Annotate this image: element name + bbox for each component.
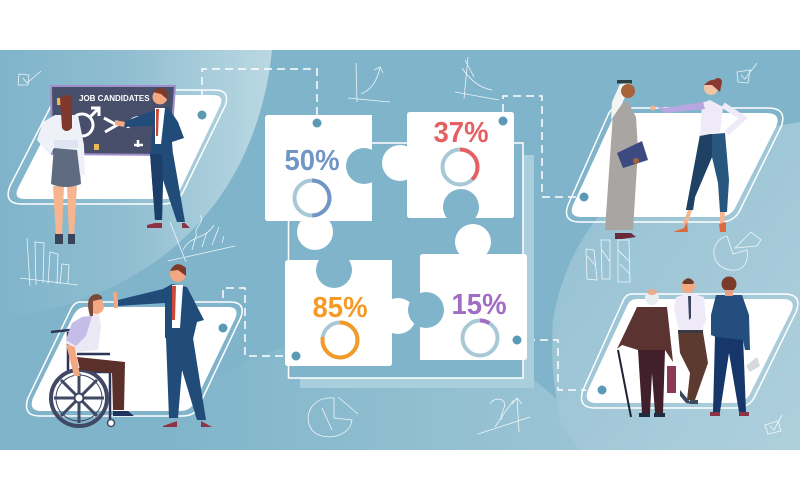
puzzle piece: 50% <box>265 115 382 250</box>
person: elderly man with cane <box>617 289 676 417</box>
person: woman from behind <box>37 95 85 244</box>
puzzle piece: 15% <box>408 224 527 360</box>
person: thinking man <box>674 278 708 404</box>
person: man pointing at board <box>115 88 190 228</box>
person: man in robe with folder <box>605 80 648 239</box>
label: 15%: 15% <box>452 289 507 321</box>
chalkboard: job candidates <box>51 86 175 155</box>
wheelchair <box>51 330 114 426</box>
ring: 85% <box>322 322 358 358</box>
briefcase <box>667 366 676 393</box>
board title: JOB CANDIDATES <box>79 94 150 103</box>
panel: top-left parallelogram <box>8 90 227 204</box>
ring: 50% <box>294 180 330 216</box>
panel: bottom-right parallelogram <box>582 294 798 408</box>
dashed connectors <box>202 69 586 390</box>
person: woman with glasses <box>650 78 743 232</box>
puzzle frame with shadow <box>288 143 534 388</box>
person: standing man with raised hand <box>113 264 212 427</box>
folder <box>617 141 648 168</box>
background panel <box>0 50 800 450</box>
connector dots on panels <box>198 110 606 394</box>
label: 85%: 85% <box>312 292 368 324</box>
person: man in blue suit from behind <box>710 276 760 416</box>
doodle sketches <box>18 57 782 437</box>
panel: top-right parallelogram <box>566 108 783 222</box>
puzzle piece: 37% <box>382 112 514 225</box>
label: 50%: 50% <box>284 145 340 177</box>
ring: 37% <box>442 150 478 184</box>
male and female symbols <box>71 108 146 147</box>
label: 37%: 37% <box>434 117 489 149</box>
puzzle piece: 85% <box>285 252 416 366</box>
person: man in wheelchair <box>51 294 134 426</box>
ring: 15% <box>462 320 498 356</box>
panel: bottom-left parallelogram <box>26 302 242 416</box>
